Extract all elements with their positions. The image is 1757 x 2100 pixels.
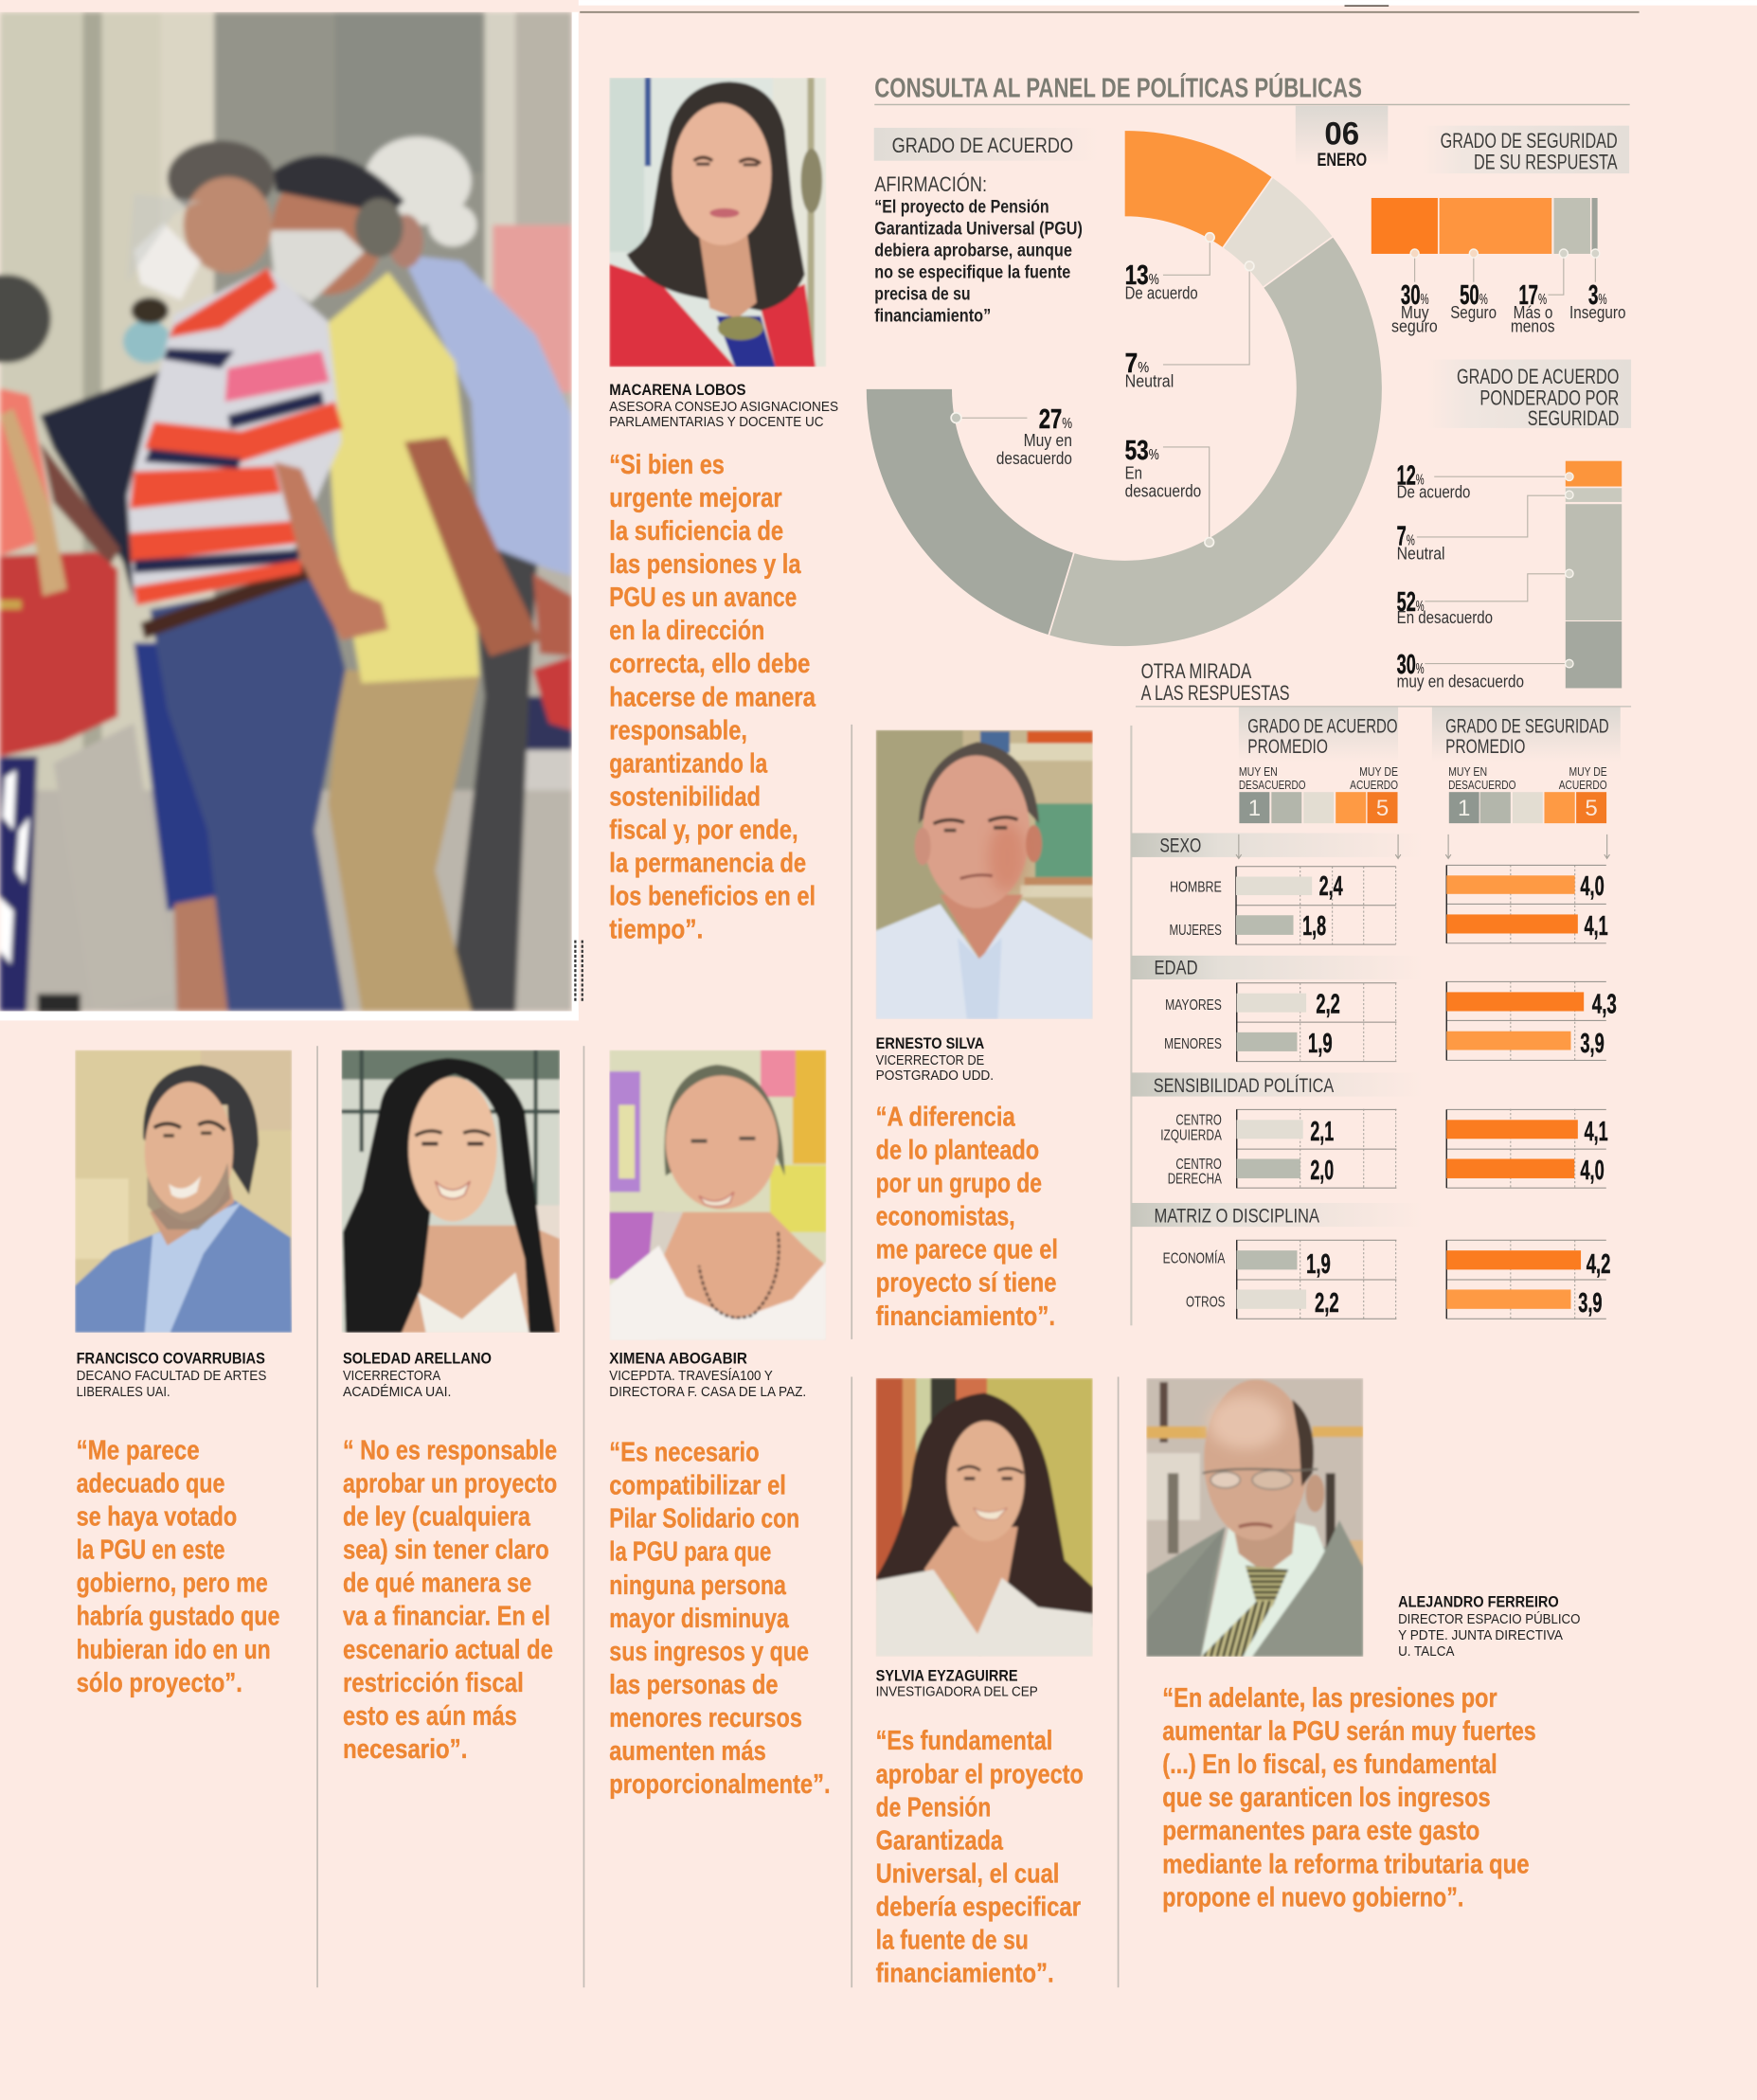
quote: Sylvia Eyzaguirre: debería especificar — [876, 1893, 1081, 1923]
photo: elderly people in masks on the street — [0, 12, 572, 1013]
scale legend left — [1239, 764, 1398, 823]
label: 27% muy en desacuerdo: desacuerdo — [996, 448, 1072, 468]
label: 27% muy en desacuerdo: 27% — [1039, 404, 1072, 434]
label: 30% muy en desacuerdo: muy en desacuerdo — [1397, 671, 1524, 691]
quote: Macarena Lobos: la permanencia de — [609, 849, 806, 879]
quote: Macarena Lobos: PGU es un avance — [609, 583, 797, 613]
quote: Sylvia Eyzaguirre: Garantizada — [876, 1825, 1004, 1856]
label: 30% muy en desacuerdo: 30% — [1397, 649, 1425, 679]
row: otros — [1186, 1287, 1603, 1318]
label: 12% de acuerdo: 12% — [1397, 459, 1425, 490]
scale legend right: MUY DE — [1569, 764, 1607, 779]
quote: Ximena Abogabir — [609, 1438, 831, 1800]
subheading: otra mirada — [1141, 659, 1290, 705]
quote: Macarena Lobos: responsable, — [609, 715, 747, 745]
quote: Ximena Abogabir: compatibilizar el — [609, 1471, 786, 1501]
quote: Alejandro Ferreiro — [1162, 1683, 1536, 1912]
heading: grado de acuerdo ponderado — [1427, 360, 1631, 430]
label: 52% en desacuerdo — [1397, 586, 1493, 627]
header: grado de acuerdo promedio: GRADO DE ACUERDO — [1247, 716, 1398, 738]
label: 12% de acuerdo: De acuerdo — [1397, 482, 1470, 502]
label: 50% seguro: Seguro — [1450, 302, 1497, 322]
marker dots — [951, 233, 1254, 547]
name: Macarena Lobos: ASESORA CONSEJO ASIGNACIONES — [609, 400, 838, 415]
quote: Ernesto Silva: economistas, — [876, 1202, 1015, 1232]
woman far back: gray trousers and legs — [54, 725, 144, 792]
label: 50% seguro — [1450, 279, 1497, 322]
portrait: Ximena Abogabir — [609, 1050, 826, 1340]
row: mujeres: 1,8 — [1302, 910, 1326, 941]
scale legend left: MUY DE — [1359, 764, 1398, 779]
label: 7% neutral — [1125, 348, 1174, 391]
quote: Ximena Abogabir: proporcionalmente”. — [609, 1769, 831, 1800]
heading: grado de seguridad: GRADO DE SEGURIDAD — [1441, 129, 1618, 153]
vertical stacked bar: ponderado — [1397, 459, 1622, 691]
name: Francisco Covarrubias: DECANO FACULTAD DE ARTES — [77, 1369, 266, 1384]
name: Alejandro Ferreiro: ALEJANDRO FERREIRO — [1398, 1594, 1559, 1611]
heading: grado de acuerdo ponderado: GRADO DE ACUERDO — [1457, 365, 1619, 388]
quote: Macarena Lobos: “Si bien es — [609, 450, 725, 480]
name: Soledad Arellano: ACADÉMICA UAI. — [343, 1384, 451, 1400]
quote: Ernesto Silva: por un grupo de — [876, 1169, 1042, 1199]
quote: Sylvia Eyzaguirre — [876, 1726, 1084, 1989]
row: mujeres — [1169, 910, 1608, 941]
heading: grado de acuerdo — [874, 128, 1099, 161]
row: mayores — [1165, 988, 1617, 1018]
quote: Alejandro Ferreiro: propone el nuevo gobierno”. — [1162, 1882, 1463, 1912]
label: 27% muy en desacuerdo — [996, 404, 1072, 468]
band: matriz o disciplina — [1131, 1203, 1423, 1228]
row: centro derecha: CENTRO — [1175, 1157, 1222, 1173]
row: hombre: HOMBRE — [1170, 880, 1222, 896]
scale legend right: ACUERDO — [1559, 778, 1607, 792]
quote: Ximena Abogabir: las personas de — [609, 1670, 778, 1700]
statement text: precisa de su — [874, 283, 971, 304]
row: mayores: MAYORES — [1165, 997, 1222, 1014]
statement text — [874, 172, 1083, 326]
name: Ximena Abogabir — [609, 1350, 806, 1400]
photo frame: white border bottom — [0, 1011, 579, 1020]
quote: Soledad Arellano: de qué manera se — [343, 1569, 531, 1599]
row: economia — [1163, 1248, 1610, 1279]
row: centro izquierda: 4,1 — [1585, 1116, 1608, 1146]
row: centro izquierda: 2,1 — [1310, 1116, 1334, 1146]
label: 13% de acuerdo — [1125, 260, 1198, 302]
quote: Macarena Lobos: los beneficios en el — [609, 882, 816, 912]
header: grado de seguridad promedio — [1432, 708, 1621, 763]
statement text: no se especifique la fuente — [874, 261, 1070, 282]
heading: grado de seguridad — [1423, 126, 1629, 174]
statement text: debiera aprobarse, aunque — [874, 240, 1072, 260]
portrait: Francisco Covarrubias — [75, 1050, 292, 1333]
name: Sylvia Eyzaguirre: INVESTIGADORA DEL CEP — [876, 1685, 1038, 1700]
portrait: Macarena Lobos — [609, 78, 826, 367]
row: centro derecha: 4,0 — [1580, 1155, 1605, 1185]
left woman — [0, 757, 38, 1011]
quote: Ximena Abogabir: aumenten más — [609, 1736, 766, 1767]
row: hombre — [1170, 871, 1605, 901]
quote: Alejandro Ferreiro: mediante la reforma tributaria que — [1162, 1849, 1530, 1879]
label: 13% de acuerdo: 13% — [1125, 260, 1159, 290]
stacked bar: seguridad — [1372, 198, 1625, 336]
band: edad — [1131, 956, 1423, 979]
band: sexo — [1131, 833, 1423, 857]
quote: Ernesto Silva: proyecto sí tiene — [876, 1268, 1057, 1299]
leader lines — [957, 237, 1249, 542]
chart title: CONSULTA AL PANEL DE POLÍTICAS PÚBLICAS — [874, 73, 1362, 103]
quote: Ximena Abogabir: ninguna persona — [609, 1571, 787, 1601]
label: 50% seguro: 50% — [1460, 279, 1488, 310]
quote: Francisco Covarrubias: “Me parece — [77, 1435, 200, 1465]
scale legend right — [1448, 764, 1607, 823]
quote: Francisco Covarrubias: sólo proyecto”. — [77, 1668, 242, 1698]
row: menores: 1,9 — [1308, 1028, 1333, 1058]
row: hombre: 4,0 — [1580, 871, 1605, 901]
quote: Ximena Abogabir: la PGU para que — [609, 1537, 771, 1568]
header: grado de acuerdo promedio: PROMEDIO — [1247, 736, 1328, 758]
top white page strip — [579, 0, 1757, 6]
quote: Macarena Lobos: hacerse de manera — [609, 682, 816, 712]
statement text: Garantizada Universal (PGU) — [874, 218, 1083, 239]
label: 17% mas o menos: Más o — [1514, 302, 1552, 322]
label: 53% en desacuerdo: En — [1125, 462, 1142, 482]
quote: Macarena Lobos: sostenibilidad — [609, 781, 761, 812]
title rule — [874, 104, 1630, 105]
quote: Francisco Covarrubias: la PGU en este — [77, 1535, 225, 1566]
quote: Ximena Abogabir: mayor disminuya — [609, 1604, 789, 1634]
portrait: Ernesto Silva — [876, 730, 1093, 1019]
row: menores — [1164, 1028, 1605, 1058]
name: Alejandro Ferreiro: U. TALCA — [1398, 1644, 1455, 1660]
label: 27% muy en desacuerdo: Muy en — [1024, 430, 1072, 450]
row: economia: ECONOMÍA — [1163, 1251, 1226, 1267]
photo frame: white border right — [572, 12, 579, 1020]
name: Macarena Lobos — [609, 382, 838, 430]
name: Ximena Abogabir: VICEPDTA. TRAVESÍA100 Y — [609, 1368, 773, 1384]
portrait: Sylvia Eyzaguirre — [876, 1378, 1093, 1658]
date box: ENERO — [1318, 150, 1367, 171]
label: 13% de acuerdo: De acuerdo — [1125, 282, 1198, 302]
quote: Ernesto Silva — [876, 1102, 1058, 1332]
panel: promedios — [1131, 708, 1621, 1319]
header: grado de seguridad promedio: GRADO DE SEGURIDAD — [1445, 716, 1609, 738]
row: centro derecha: DERECHA — [1168, 1171, 1222, 1187]
name: Francisco Covarrubias: FRANCISCO COVARRUBIAS — [77, 1350, 265, 1367]
portrait: Soledad Arellano — [342, 1050, 560, 1333]
heading: grado de seguridad: DE SU RESPUESTA — [1474, 151, 1618, 174]
row: centro derecha: 2,0 — [1310, 1155, 1334, 1185]
yellow shirt man — [328, 670, 479, 1011]
label: 3% inseguro — [1569, 279, 1625, 322]
name: Soledad Arellano — [343, 1350, 492, 1400]
label: 30% muy seguro — [1391, 279, 1438, 336]
label: 53% en desacuerdo — [1125, 435, 1201, 501]
header rule — [580, 11, 1640, 13]
name: Macarena Lobos: PARLAMENTARIAS Y DOCENTE UC — [609, 415, 824, 430]
quote: Francisco Covarrubias: hubieran ido en un — [77, 1635, 271, 1665]
row: mayores: 2,2 — [1316, 988, 1340, 1018]
label: 3% inseguro: 3% — [1588, 279, 1607, 310]
quote: Soledad Arellano: escenario actual de — [343, 1635, 553, 1665]
scale legend left: ACUERDO — [1350, 778, 1398, 792]
row: centro derecha — [1168, 1155, 1605, 1187]
label: 30% muy seguro: seguro — [1391, 316, 1438, 336]
averages panel side rule — [1130, 726, 1132, 1325]
quote: Soledad Arellano — [343, 1435, 557, 1765]
quote: Soledad Arellano: restricción fiscal — [343, 1668, 524, 1698]
row: menores: 3,9 — [1580, 1028, 1605, 1058]
label: 7% neutral: 7% — [1397, 520, 1415, 550]
name: Macarena Lobos: MACARENA LOBOS — [609, 382, 746, 399]
name: Ernesto Silva: POSTGRADO UDD. — [876, 1068, 994, 1084]
segment: de acuerdo 13% — [1124, 130, 1273, 248]
row: mayores: 4,3 — [1592, 988, 1617, 1018]
label: 17% mas o menos: menos — [1511, 316, 1555, 336]
date box — [1296, 106, 1388, 171]
quote: Alejandro Ferreiro: aumentar la PGU serán muy fuertes — [1162, 1716, 1536, 1747]
quote: Ernesto Silva: me parece que el — [876, 1235, 1058, 1265]
band: matriz o disciplina: MATRIZ O DISCIPLINA — [1154, 1206, 1320, 1228]
quote: Sylvia Eyzaguirre: la fuente de su — [876, 1926, 1029, 1956]
quote: Alejandro Ferreiro: “En adelante, las presiones por — [1162, 1683, 1497, 1714]
name: Ximena Abogabir: XIMENA ABOGABIR — [609, 1350, 747, 1367]
quote: Macarena Lobos: la suficiencia de — [609, 516, 783, 547]
label: 7% neutral — [1397, 520, 1445, 563]
quote: Ximena Abogabir: “Es necesario — [609, 1438, 760, 1468]
back person dark jacket — [40, 368, 168, 602]
striped man head — [168, 140, 275, 216]
row: otros: 2,2 — [1315, 1287, 1339, 1318]
quote: Macarena Lobos: correcta, ello debe — [609, 649, 810, 679]
statement text: financiamiento” — [874, 305, 991, 326]
name: Francisco Covarrubias: LIBERALES UAI. — [77, 1385, 170, 1400]
quote: Alejandro Ferreiro: (...) En lo fiscal, es fundamental — [1162, 1750, 1497, 1780]
quote: Macarena Lobos: en la dirección — [609, 616, 764, 646]
label: 30% muy en desacuerdo — [1397, 649, 1524, 691]
quote: Macarena Lobos — [609, 450, 816, 945]
row: economia: 4,2 — [1587, 1248, 1610, 1279]
name: Francisco Covarrubias — [77, 1350, 266, 1400]
quote: Soledad Arellano: necesario”. — [343, 1734, 467, 1765]
quote: Soledad Arellano: va a financiar. En el — [343, 1602, 550, 1632]
name: Ernesto Silva — [876, 1035, 994, 1084]
label: 7% neutral: 7% — [1125, 348, 1149, 378]
row: mujeres: MUJERES — [1169, 923, 1222, 939]
quote: Sylvia Eyzaguirre: financiamiento”. — [876, 1959, 1054, 1989]
quote: Alejandro Ferreiro: que se garanticen los ingresos — [1162, 1783, 1491, 1813]
name: Soledad Arellano: VICERRECTORA — [343, 1369, 440, 1384]
scale legend left: 5 — [1376, 796, 1389, 821]
header: grado de seguridad promedio: PROMEDIO — [1445, 736, 1525, 758]
striped shirt man jeans — [150, 576, 346, 1011]
section rule — [1136, 706, 1631, 708]
band: edad: EDAD — [1154, 957, 1198, 978]
label: 53% en desacuerdo: 53% — [1125, 435, 1159, 465]
band: sensibilidad politica: SENSIBILIDAD POLÍTICA — [1154, 1073, 1335, 1097]
right man — [449, 543, 538, 1011]
scale legend right: 5 — [1585, 796, 1598, 821]
quote: Sylvia Eyzaguirre: Universal, el cual — [876, 1859, 1059, 1890]
label: 53% en desacuerdo: desacuerdo — [1125, 481, 1201, 501]
quote: Ximena Abogabir: Pilar Solidario con — [609, 1504, 799, 1535]
quote: Ernesto Silva: de lo planteado — [876, 1135, 1039, 1165]
row: centro izquierda: CENTRO — [1175, 1112, 1222, 1128]
scale arrows — [1236, 835, 1609, 858]
quote: Soledad Arellano: esto es aún más — [343, 1701, 517, 1732]
row: mujeres: 4,1 — [1585, 910, 1608, 941]
scale legend right: DESACUERDO — [1448, 778, 1516, 792]
subheading: otra mirada: A LAS RESPUESTAS — [1141, 681, 1290, 705]
name: Alejandro Ferreiro — [1398, 1594, 1580, 1660]
date box: 06 — [1324, 117, 1359, 153]
chart frames and grid — [1236, 865, 1606, 1319]
row: centro izquierda — [1160, 1112, 1608, 1146]
row: otros: 3,9 — [1578, 1287, 1603, 1318]
quote: Macarena Lobos: urgente mejorar — [609, 483, 782, 513]
name: Alejandro Ferreiro: DIRECTOR ESPACIO PÚBLICO — [1398, 1611, 1580, 1627]
label: 30% muy seguro: 30% — [1401, 279, 1429, 310]
scale legend left: DESACUERDO — [1239, 778, 1306, 792]
statement text: “El proyecto de Pensión — [874, 196, 1049, 217]
subheading: otra mirada: OTRA MIRADA — [1141, 659, 1252, 683]
quote: Macarena Lobos: tiempo”. — [609, 915, 703, 945]
quote: Ximena Abogabir: menores recursos — [609, 1703, 802, 1733]
quote: Sylvia Eyzaguirre: de Pensión — [876, 1792, 991, 1822]
quote: Francisco Covarrubias: se haya votado — [77, 1502, 237, 1533]
quote: Francisco Covarrubias: habría gustado que — [77, 1602, 279, 1632]
quote: Sylvia Eyzaguirre: “Es fundamental — [876, 1726, 1052, 1756]
row: menores: MENORES — [1164, 1036, 1222, 1052]
name: Sylvia Eyzaguirre: SYLVIA EYZAGUIRRE — [876, 1667, 1018, 1684]
quote: Macarena Lobos: garantizando la — [609, 748, 768, 779]
name: Ernesto Silva: ERNESTO SILVA — [876, 1035, 984, 1052]
quote: Soledad Arellano: “ No es responsable — [343, 1435, 557, 1465]
column dividers — [317, 725, 1119, 1987]
scale legend right: 1 — [1458, 796, 1470, 821]
name: Sylvia Eyzaguirre — [876, 1667, 1038, 1700]
label: 17% mas o menos: 17% — [1518, 279, 1547, 310]
donut chart: grado de acuerdo — [866, 130, 1383, 647]
scale legend left: 1 — [1248, 796, 1261, 821]
quote: Alejandro Ferreiro: permanentes para este gasto — [1162, 1816, 1479, 1846]
quote: Francisco Covarrubias: adecuado que — [77, 1469, 225, 1499]
label: 52% en desacuerdo: En desacuerdo — [1397, 607, 1493, 627]
quote: Soledad Arellano: sea) sin tener claro — [343, 1535, 549, 1566]
label: 3% inseguro: Inseguro — [1569, 302, 1625, 322]
photo credit marks — [575, 941, 583, 1002]
quote: Soledad Arellano: de ley (cualquiera — [343, 1502, 531, 1533]
quote: Sylvia Eyzaguirre: aprobar el proyecto — [876, 1759, 1084, 1789]
short header mark — [1345, 5, 1389, 7]
label: 52% en desacuerdo: 52% — [1397, 586, 1425, 617]
portrait: Alejandro Ferreiro — [1146, 1378, 1363, 1657]
quote: Macarena Lobos: fiscal y, por ende, — [609, 816, 798, 846]
label: 17% mas o menos — [1511, 279, 1555, 336]
quote: Ernesto Silva: “A diferencia — [876, 1102, 1015, 1132]
heading: grado de acuerdo ponderado: PONDERADO POR — [1479, 386, 1619, 409]
scale legend left: MUY EN — [1239, 764, 1278, 779]
quote: Soledad Arellano: aprobar un proyecto — [343, 1469, 557, 1499]
quote: Francisco Covarrubias: gobierno, pero me — [77, 1569, 268, 1599]
label: 7% neutral: Neutral — [1397, 543, 1445, 563]
segment: en desacuerdo 53% — [1049, 237, 1383, 647]
quote: Macarena Lobos: las pensiones y la — [609, 549, 801, 580]
striped shirt — [127, 268, 342, 602]
name: Alejandro Ferreiro: Y PDTE. JUNTA DIRECTIVA — [1398, 1628, 1563, 1643]
heading: grado de acuerdo: GRADO DE ACUERDO — [892, 134, 1073, 157]
row: hombre: 2,4 — [1319, 871, 1343, 901]
row: economia: 1,9 — [1306, 1248, 1331, 1279]
quote: Ximena Abogabir: sus ingresos y que — [609, 1637, 809, 1667]
label: 7% neutral: Neutral — [1125, 371, 1174, 391]
label: 12% de acuerdo — [1397, 459, 1470, 502]
quote: Francisco Covarrubias — [77, 1435, 279, 1698]
scale legend right: MUY EN — [1448, 764, 1487, 779]
name: Soledad Arellano: SOLEDAD ARELLANO — [343, 1350, 492, 1367]
header: grado de acuerdo promedio — [1239, 708, 1398, 763]
statement text: AFIRMACIÓN: — [874, 172, 987, 196]
heading: grado de acuerdo ponderado: SEGURIDAD — [1528, 406, 1619, 430]
row: centro izquierda: IZQUIERDA — [1160, 1127, 1222, 1143]
label: 30% muy seguro: Muy — [1401, 302, 1429, 322]
quote: Ernesto Silva: financiamiento”. — [876, 1301, 1055, 1332]
row: otros: OTROS — [1186, 1295, 1225, 1311]
band: sexo: SEXO — [1159, 835, 1201, 857]
segment: muy en desacuerdo 27% — [866, 388, 1074, 636]
name: Ximena Abogabir: DIRECTORA F. CASA DE LA PAZ. — [609, 1385, 806, 1400]
segment: neutral 7% — [1223, 177, 1334, 288]
name: Ernesto Silva: VICERRECTOR DE — [876, 1053, 984, 1068]
